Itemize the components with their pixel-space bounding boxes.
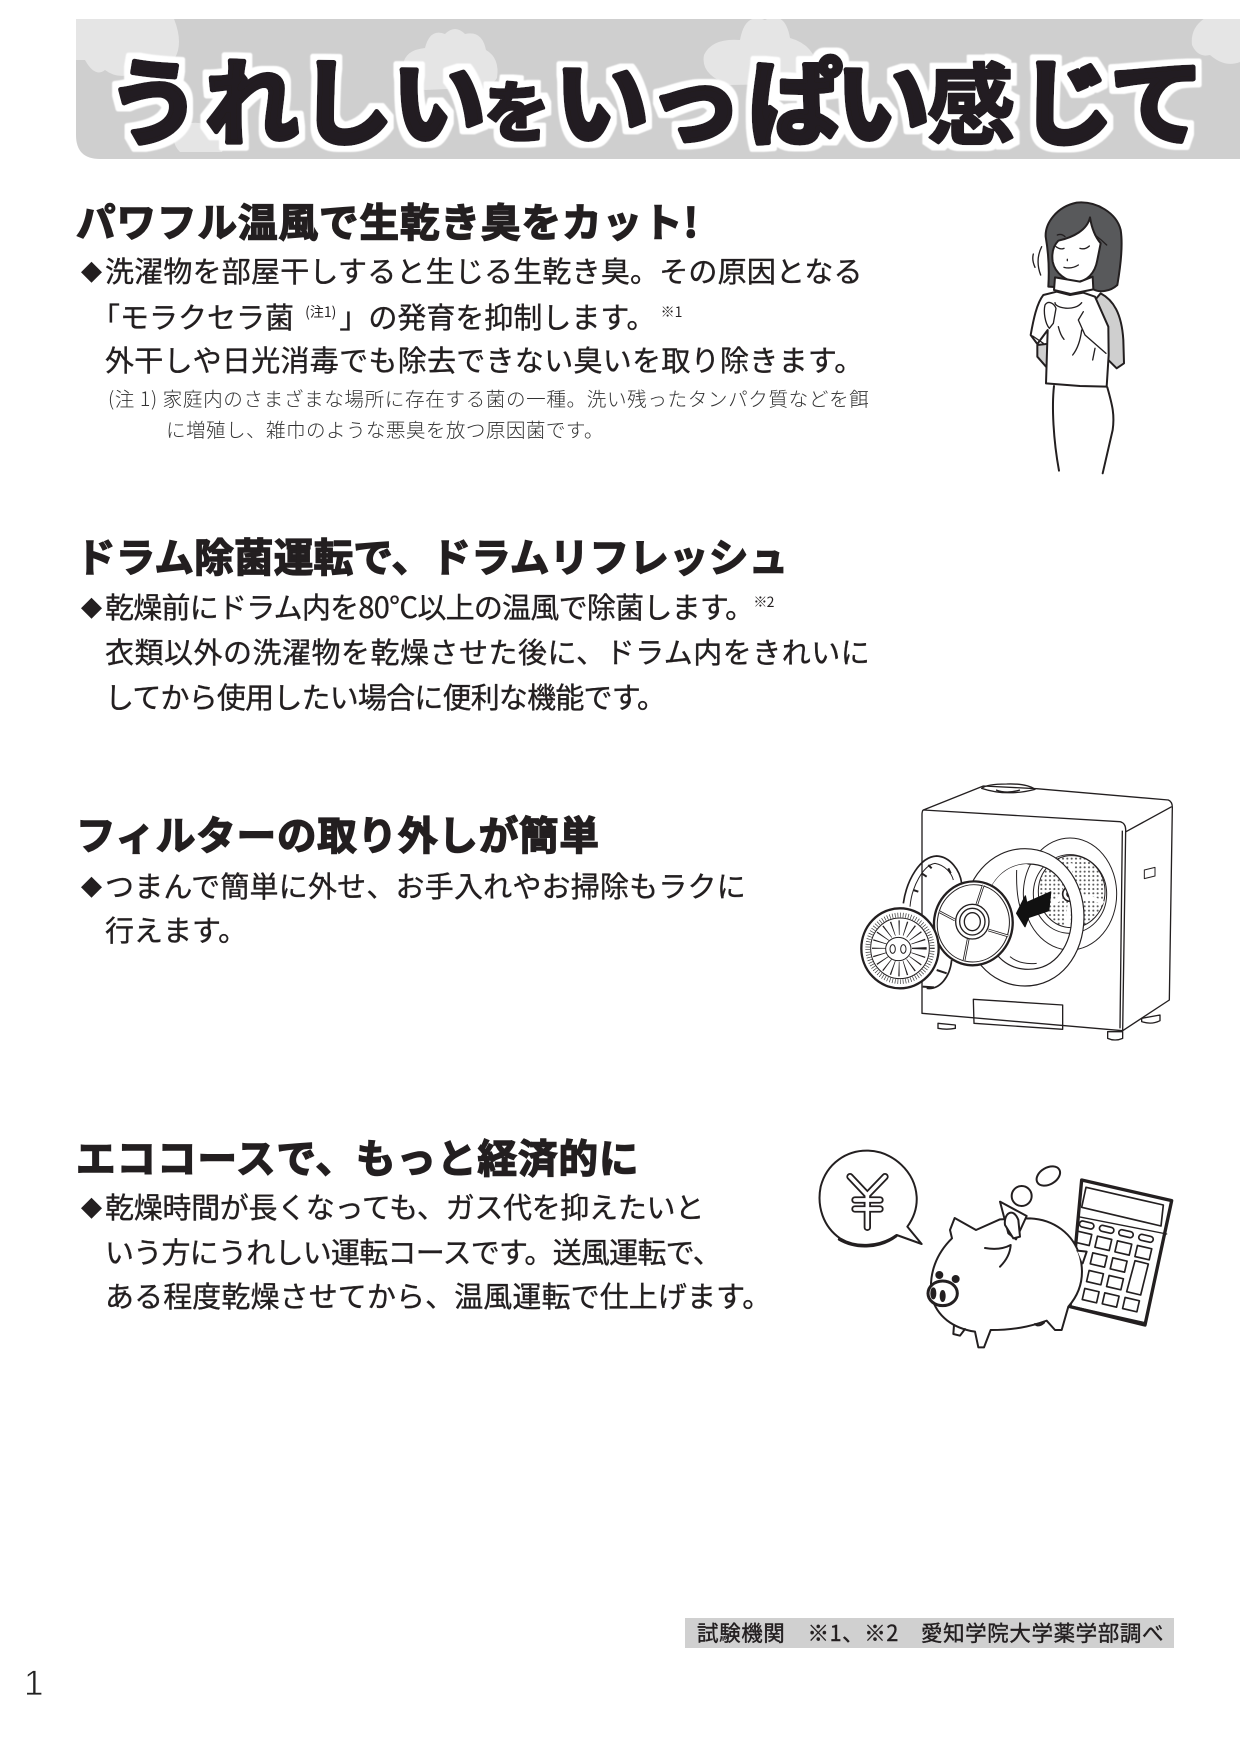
illustration: dryer with filters: [860, 783, 1173, 1041]
body line 1: ◆: [81, 872, 102, 902]
icon: calculator: [1070, 1180, 1172, 1325]
body line 1: ◆: [81, 257, 102, 287]
section 3: filter removal: [76, 805, 746, 950]
body line 1: ◆: [81, 1193, 102, 1223]
body line 3: してから使用したい場合に便利な機能です。: [105, 675, 665, 717]
title banner: [76, 19, 1240, 165]
body line 2: 「モラクセラ菌 (注1)」の発育を抑制します。 ※1: [91, 295, 682, 337]
illustration: woman smelling laundry: [1030, 201, 1125, 474]
section 2: drum sterilization: [76, 527, 870, 717]
title text: うれしい: [107, 29, 486, 165]
heading 4: エココースで、もっと経済的に: [76, 1128, 639, 1185]
body line 3: ある程度乾燥させてから、温風運転で仕上げます。: [105, 1274, 771, 1316]
page number: 1: [24, 1664, 43, 1703]
section 4: eco course: [76, 1128, 771, 1316]
heading 3: フィルターの取り外しが簡単: [76, 805, 600, 862]
body line 2: 行えます。: [105, 908, 247, 950]
title text: 感: [927, 36, 1015, 163]
body line 3: 外干しや日光消毒でも除去できない臭いを取り除きます。: [105, 338, 864, 380]
title text: を: [484, 60, 550, 156]
note line 2: に増殖し、雑巾のような悪臭を放つ原因菌です。: [166, 414, 604, 443]
footer: testing institution note: 試験機関 ※1、※2 愛知学院大学薬学部調べ: [697, 1617, 1164, 1648]
body line 1: 乾燥前にドラム内を80℃以上の温風で除菌します。※2: [105, 585, 774, 627]
body line 1: 乾燥時間が長くなっても、ガス代を抑えたいと: [105, 1185, 704, 1227]
heading 1: パワフル温風で生乾き臭をカット!: [76, 192, 699, 249]
illustration: piggy bank, yen bubble and calculator: [818, 1150, 1174, 1348]
icon: speech bubble with yen: [820, 1151, 922, 1246]
note line 1: (注 1) 家庭内のさまざまな場所に存在する菌の一種。洗い残ったタンパク質などを餌: [108, 383, 869, 412]
body line 1: つまんで簡単に外せ、お手入れやお掃除もラクに: [105, 864, 746, 906]
body line 2: 衣類以外の洗濯物を乾燥させた後に、ドラム内をきれいに: [105, 630, 870, 672]
body line 1: 洗濯物を部屋干しすると生じる生乾き臭。その原因となる: [105, 249, 863, 291]
title text: じて: [1020, 29, 1204, 165]
heading 2: ドラム除菌運転で、ドラムリフレッシュ: [76, 527, 788, 584]
title text: いっぱい: [555, 29, 930, 165]
section 1: powerful warm air: [76, 192, 869, 443]
body line 1: ◆: [81, 593, 102, 623]
body line 2: いう方にうれしい運転コースです。送風運転で、: [105, 1230, 721, 1272]
icon: piggy bank: [928, 1162, 1087, 1347]
